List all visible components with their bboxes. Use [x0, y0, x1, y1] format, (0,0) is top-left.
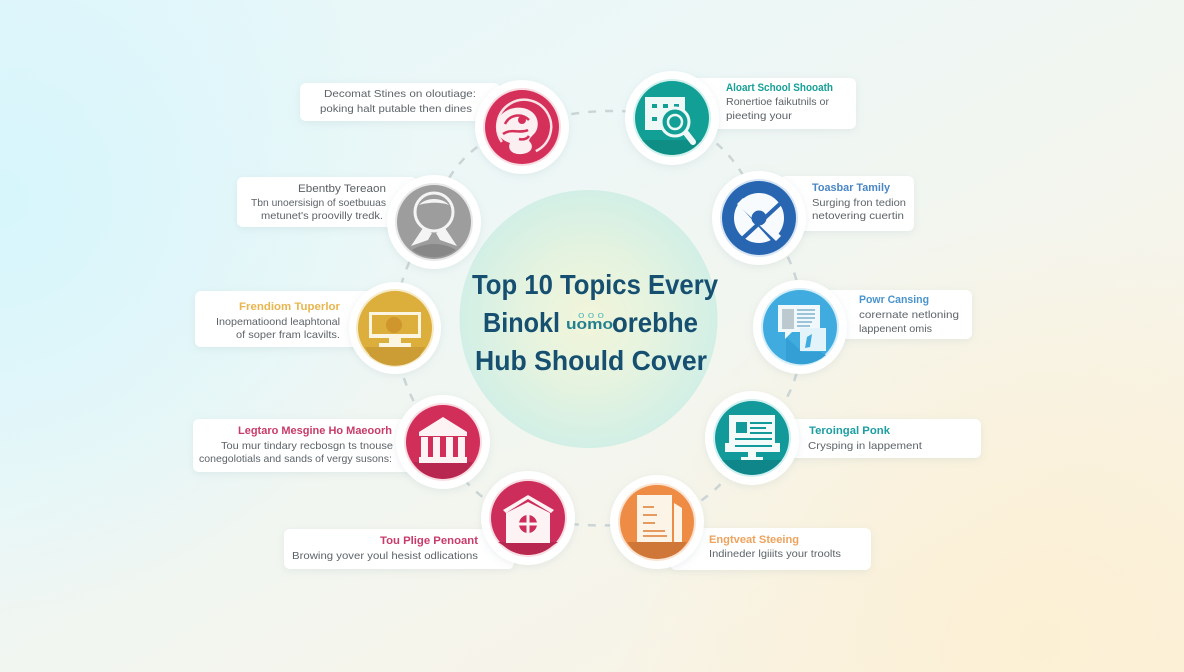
dashed connector ring — [395, 111, 801, 525]
panel: topic 10 card: Ronertioe faikutnils or — [726, 96, 829, 108]
panel: topic 1 card — [300, 83, 500, 121]
icon: lifebuoy — [712, 171, 806, 265]
icon: person — [387, 175, 481, 269]
icon: magnifier on chart — [625, 71, 719, 165]
panel: topic 1 card: Decomat Stines on oloutiage: — [324, 88, 476, 100]
panel: topic 2 card: Ebentby Tereaon — [298, 183, 386, 195]
panel: topic 7 card — [770, 419, 981, 458]
title: Hub Should Cover — [475, 345, 707, 376]
panel: topic 10 card — [690, 78, 856, 129]
panel: topic 8 card: lappenent omis — [859, 323, 932, 335]
icon: house with cross — [481, 471, 575, 565]
icon: institution building — [396, 395, 490, 489]
panel: topic 5 card: Browing yover youl hesist odlications — [292, 550, 478, 562]
panel: topic 6 card: Indineder lgiiits your troolts — [709, 548, 841, 560]
title: Top 10 Topics Every — [472, 269, 718, 300]
panel: topic 9 card: netovering cuertin — [812, 210, 904, 222]
panel: topic 2 card: metunet's proovilly tredk. — [261, 210, 383, 222]
panel: topic 6 card: Engtveat Steeing — [709, 534, 799, 546]
panel: topic 3 card — [195, 291, 375, 347]
title — [472, 269, 718, 376]
panel: topic 9 card — [780, 176, 914, 231]
panel: topic 7 card: Crysping in lappement — [808, 440, 922, 452]
panel: topic 8 card: corernate netloning — [859, 309, 959, 321]
panel: topic 9 card: Surging fron tedion — [812, 197, 906, 209]
icon: chat document — [753, 280, 847, 374]
panel: topic 10 card: pieeting your — [726, 110, 793, 122]
panel: topic 9 card: Toasbar Tamily — [812, 182, 891, 194]
panel: topic 1 card: poking halt putable then dines — [320, 103, 472, 115]
icon: document — [610, 475, 704, 569]
icon: desktop computer — [705, 391, 799, 485]
panel: topic 4 card: Legtaro Mesgine Ho Maeoorh — [238, 425, 392, 437]
panel: topic 8 card: Powr Cansing — [859, 294, 929, 306]
icon: monitor — [349, 282, 441, 374]
panel: topic 8 card — [820, 290, 972, 339]
title: uomo — [566, 316, 613, 333]
title: Binokl — [483, 307, 560, 338]
panel: topic 7 card: Teroingal Ponk — [809, 425, 891, 437]
panel: topic 4 card: conegolotials and sands of vergy susons: — [199, 453, 392, 465]
panel: topic 5 card: Tou Plige Penoant — [380, 535, 478, 547]
panel: topic 10 card: Aloart School Shooath — [726, 82, 833, 94]
icon: brain — [475, 80, 569, 174]
panel: topic 4 card: Tou mur tindary recbosgn ts tnouse — [221, 440, 393, 452]
panel: topic 3 card: of soper fram lcavilts. — [236, 329, 340, 341]
panel: topic 4 card — [193, 419, 423, 472]
panel: topic 2 card: Tbn unoersisign of soetbuuas — [251, 197, 386, 209]
panel: topic 3 card: Frendiom Tuperlor — [239, 301, 341, 313]
title: o o o — [578, 310, 604, 320]
panel: topic 6 card — [670, 528, 871, 570]
central hub circle — [460, 190, 718, 448]
panel: topic 5 card — [284, 529, 514, 569]
panel: topic 3 card: Inopematioond leaphtonal — [216, 316, 340, 328]
title: orebhe — [612, 307, 698, 338]
panel: topic 2 card — [237, 177, 417, 227]
